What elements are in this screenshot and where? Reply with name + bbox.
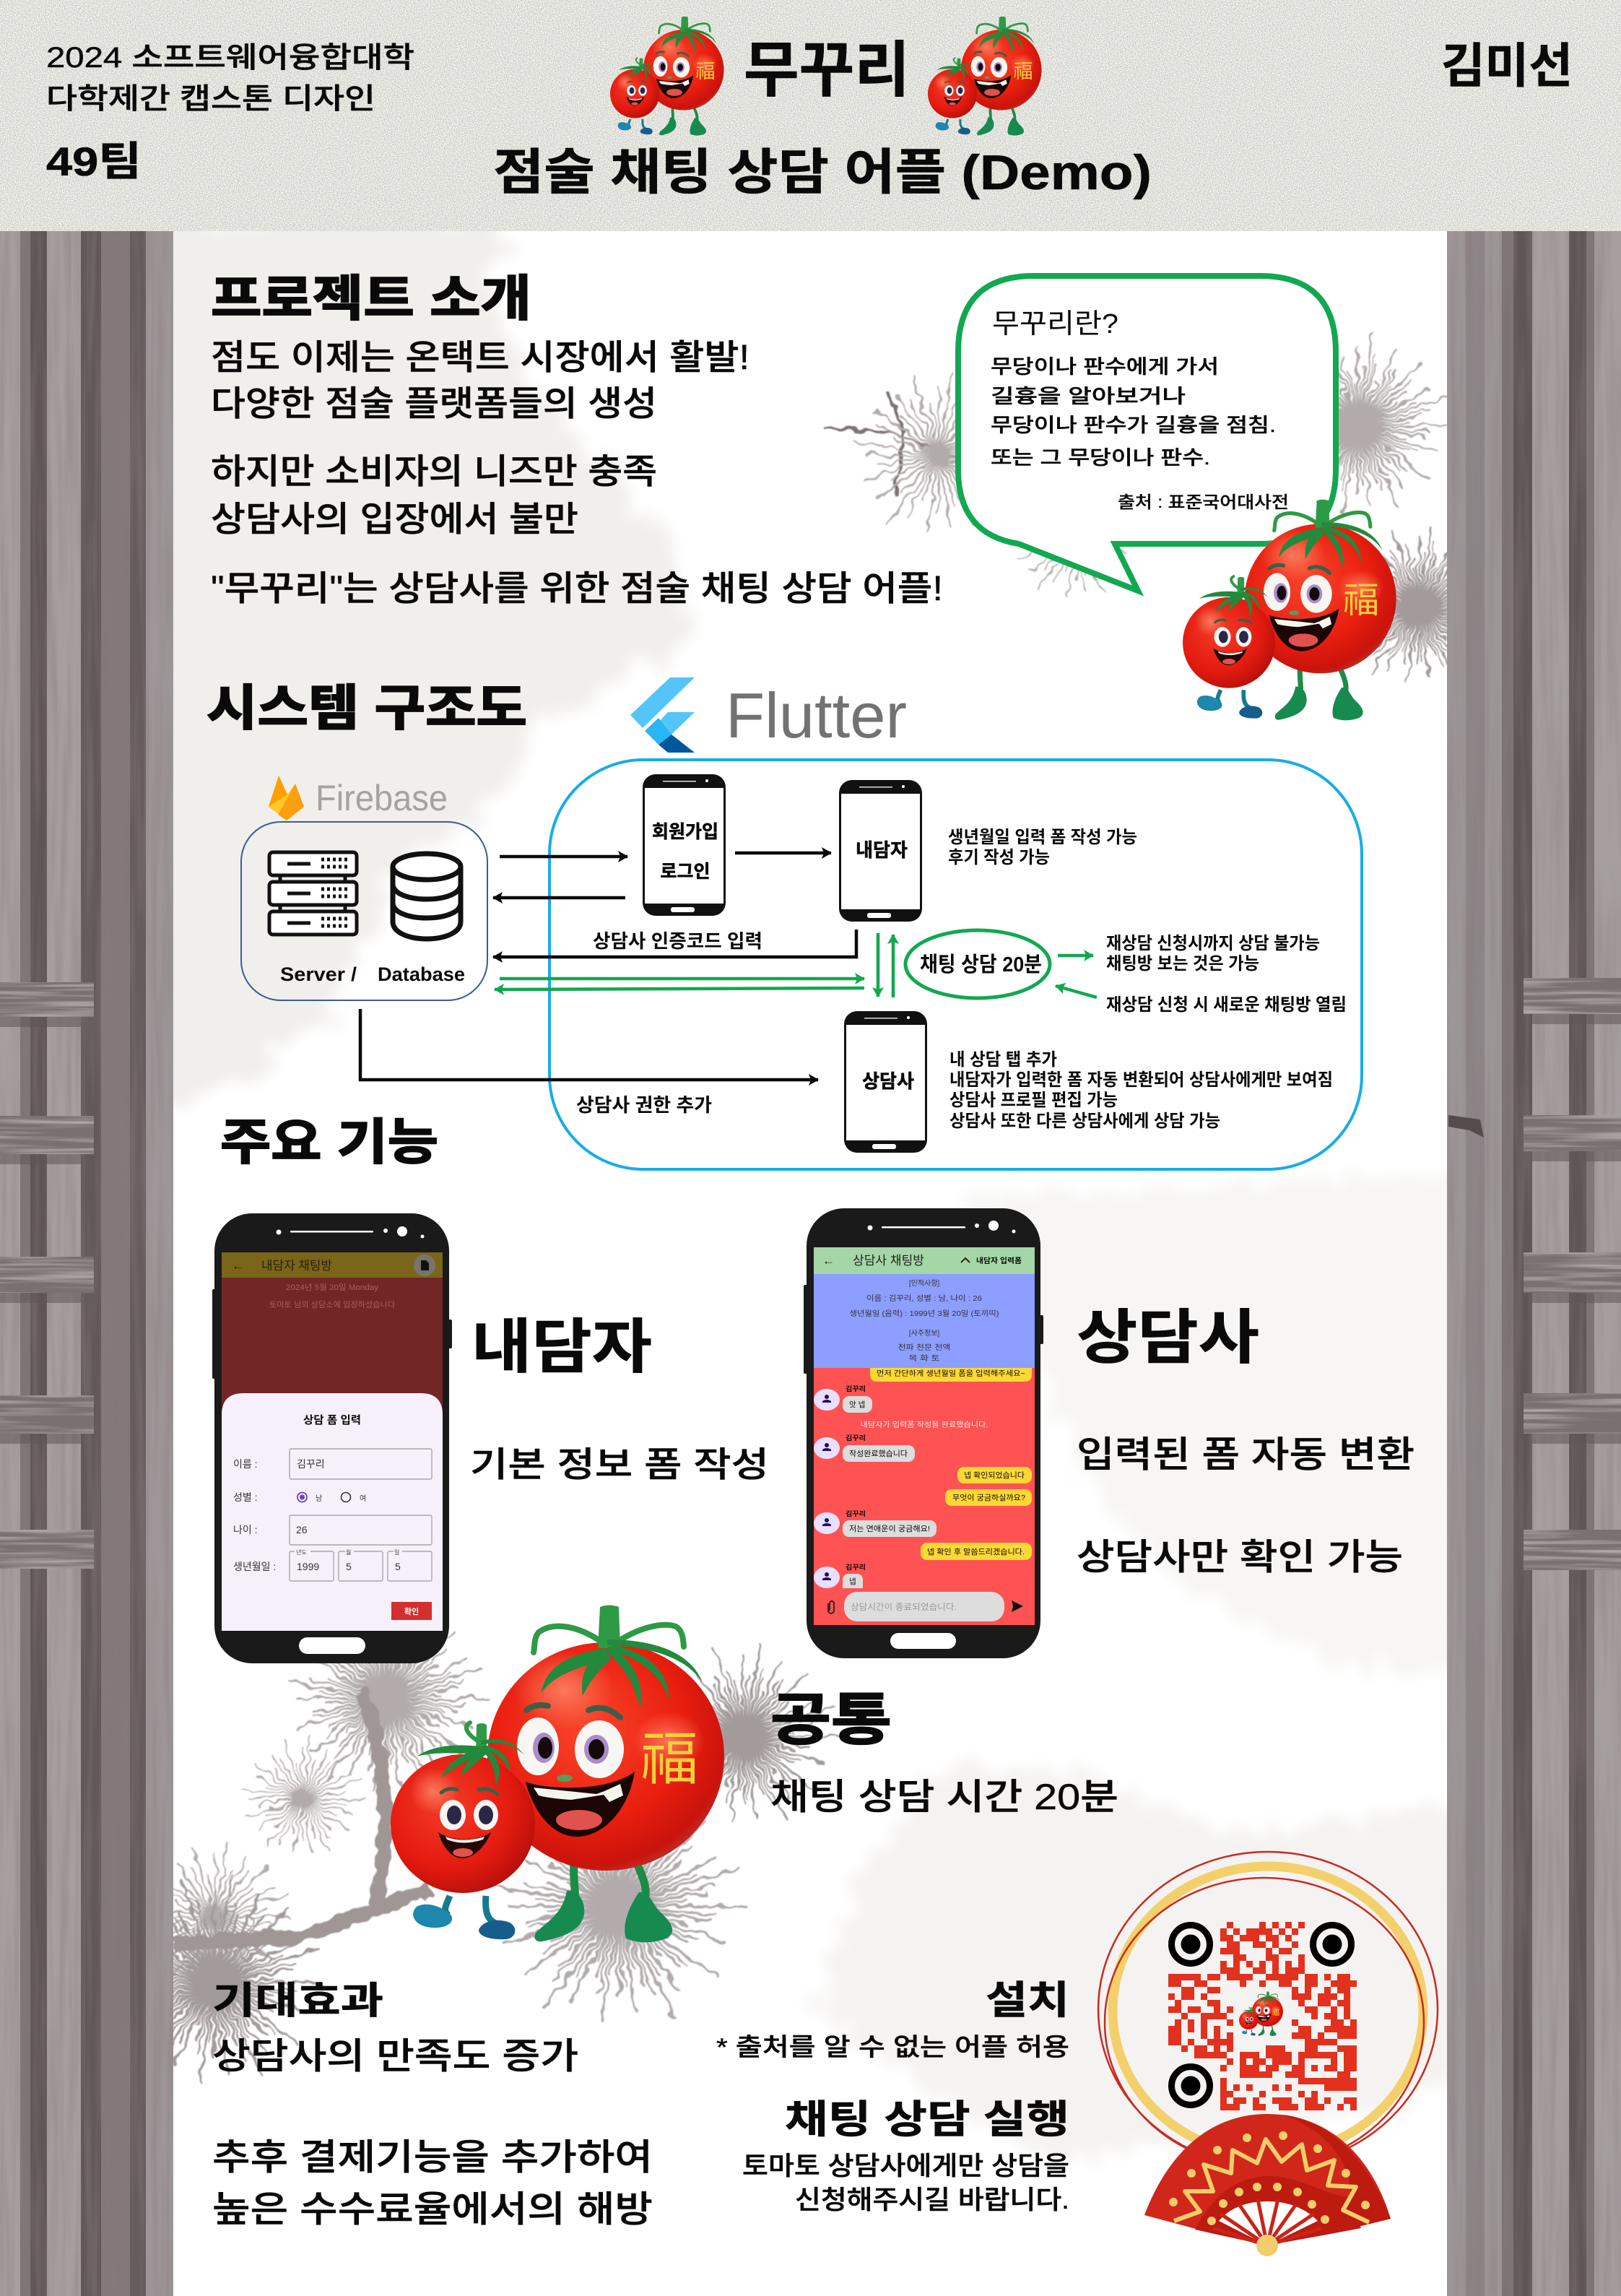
- phone screenshot: counselor: 김꾸리: [846, 1563, 866, 1571]
- speech bubble: definition: 길흉을 알아보거나: [991, 386, 1186, 407]
- notes: diagram descriptions: 재상담 신청시까지 상담 불가능: [1106, 934, 1320, 953]
- phone: signup and login: 로그인: [660, 862, 710, 882]
- feature text: client: 기본 정보 폼 작성: [470, 1446, 769, 1484]
- mascot: large tomatoes: 福: [640, 1727, 698, 1791]
- notes: diagram descriptions: 상담사 또한 다른 상담사에게 상담 가능: [949, 1112, 1220, 1131]
- panel: install and run guide: 토마토 상담사에게만 상담을: [742, 2151, 1069, 2180]
- phone screenshot: client: 월: [346, 1548, 351, 1556]
- header: mascot left: [610, 17, 724, 136]
- logo: Flutter: [630, 677, 907, 753]
- phone screenshot: counselor: 상담시간이 종료되었습니다.: [851, 1602, 957, 1612]
- phone screenshot: counselor: 생년월일 (음력) : 1999년 3월 20일 (토끼띠): [849, 1309, 999, 1318]
- panel: install and run guide: 설치: [986, 1979, 1069, 2022]
- header: course info: 49팀: [46, 139, 142, 184]
- notes: diagram descriptions: 내 상담 탭 추가: [949, 1050, 1057, 1070]
- phone screenshot: client: 나이 :: [233, 1524, 258, 1535]
- QR code: [1168, 1925, 1357, 2107]
- panel: project intro: "무꾸리"는 상담사를 위한 점술 채팅 상담 어플!: [211, 570, 943, 608]
- notes: diagram descriptions: 내담자가 입력한 폼 자동 변환되어 상담사에게만 보여짐: [949, 1070, 1333, 1090]
- mascot: beside bubble: [1183, 500, 1396, 720]
- speech bubble: definition: [958, 276, 1336, 591]
- phone screenshot: counselor: 넵 확인되었습니다: [964, 1470, 1025, 1480]
- panel: expected effects: 추후 결제기능을 추가하여: [212, 2137, 653, 2178]
- mascot: QR centre: 福: [1272, 2009, 1279, 2017]
- panel: expected effects: 높은 수수료율에서의 해방: [212, 2189, 653, 2230]
- icon: folding fan: [1144, 2114, 1391, 2256]
- header: title: 점술 채팅 상담 어플 (Demo): [493, 145, 1152, 200]
- phone screenshot: client: 김꾸리: [297, 1458, 325, 1470]
- phone screenshot: client: 성별 :: [233, 1491, 258, 1503]
- phone screenshot: counselor: 내담자 입력폼: [976, 1256, 1022, 1265]
- node: 20 minute chat: 채팅 상담 20분: [920, 953, 1042, 976]
- phone screenshot: client: 일: [394, 1549, 399, 1556]
- phone: counselor: 상담사: [862, 1070, 914, 1092]
- panel: project intro: 상담사의 입장에서 불만: [211, 501, 578, 539]
- phone screenshot: client: 5: [346, 1561, 352, 1572]
- phone screenshot: counselor: 무엇이 궁금하실까요?: [952, 1493, 1025, 1502]
- phone screenshot: counselor: [인적사항]: [909, 1279, 939, 1288]
- logo: Firebase: Firebase: [316, 778, 448, 818]
- notes: diagram descriptions: 후기 작성 가능: [948, 848, 1050, 867]
- phone screenshot: counselor: ←: [822, 1254, 835, 1268]
- feature text: common: 공통: [770, 1688, 892, 1751]
- panel: expected effects: [212, 1980, 653, 2230]
- phone screenshot: counselor: 김꾸리: [846, 1434, 866, 1442]
- feature text: common: [770, 1688, 1118, 1817]
- notes: diagram descriptions: 생년월일 입력 폼 작성 가능: [948, 828, 1137, 847]
- phone screenshot: counselor: 넵 확인 후 말씀드리겠습니다.: [927, 1547, 1025, 1556]
- node: 20 minute chat: [905, 930, 1050, 998]
- background: ink wash: [130, 217, 1473, 2159]
- door: left: [0, 231, 173, 2296]
- speech bubble: definition: 또는 그 무당이나 판수.: [991, 447, 1210, 469]
- header: mascot right: 福: [1014, 61, 1033, 82]
- feature text: client: 내담자: [471, 1314, 652, 1380]
- phone screenshot: client: ←: [232, 1259, 244, 1273]
- phone screenshot: client: 5: [395, 1561, 401, 1572]
- phone screenshot: client: 여: [360, 1494, 366, 1503]
- phone screenshot: client: 생년월일 :: [233, 1561, 276, 1572]
- phone screenshot: counselor: 목 화 토: [908, 1354, 940, 1363]
- mascot: large tomatoes: [391, 1605, 724, 1942]
- icon: server: [269, 852, 357, 935]
- phone screenshot: client: [212, 1213, 452, 1663]
- phone screenshot: client: 이름 :: [233, 1458, 258, 1470]
- header: mascot right: [928, 17, 1042, 136]
- phone screenshot: client: 남: [316, 1494, 322, 1503]
- phone: client: 내담자: [856, 839, 908, 861]
- background: paper: [173, 231, 1448, 2296]
- panel: project intro: 하지만 소비자의 니즈만 충족: [211, 453, 657, 491]
- phone screenshot: counselor: 앗 넵: [849, 1400, 865, 1409]
- QR finder marks: [1171, 1925, 1352, 2105]
- panel: server and database: [241, 822, 487, 1000]
- panel: project intro: 다양한 점술 플랫폼들의 생성: [211, 385, 657, 423]
- panel: project intro: 점도 이제는 온택트 시장에서 활발!: [211, 339, 749, 377]
- mascot: QR centre: [1239, 1991, 1283, 2036]
- labels: diagram arrows: 상담사 권한 추가: [576, 1094, 712, 1116]
- phone screenshot: counselor: 천파 천문 천액: [898, 1343, 950, 1352]
- phone screenshot: client: 년도: [296, 1548, 307, 1556]
- header: course info: 2024 소프트웨어융합대학: [46, 42, 414, 74]
- panel: install and run guide: 신청해주시길 바랍니다.: [795, 2185, 1069, 2214]
- phone screenshot: counselor: 내담자가 입력폼 작성을 완료했습니다.: [861, 1420, 988, 1429]
- phone screenshot: counselor: 상담사 채팅방: [853, 1254, 924, 1268]
- icon: database: [393, 854, 461, 939]
- panel: server and database: Server /: [280, 963, 357, 985]
- heading: main features: 주요 기능: [220, 1115, 438, 1170]
- phone screenshot: client: 상담 폼 입력: [303, 1414, 361, 1426]
- speech bubble: definition: 출처 : 표준국어대사전: [1118, 493, 1289, 511]
- arrows: diagram flow: [360, 853, 1097, 1080]
- speech bubble: definition: 무꾸리란?: [992, 309, 1118, 339]
- heading: project intro: 프로젝트 소개: [211, 272, 531, 326]
- phone: counselor: [844, 1011, 927, 1153]
- heading: system architecture: 시스템 구조도: [207, 681, 527, 736]
- notes: diagram descriptions: 채팅방 보는 것은 가능: [1106, 954, 1259, 974]
- feature text: counselor: [1077, 1305, 1414, 1577]
- panel: install and run guide: 채팅 상담 실행: [785, 2098, 1069, 2141]
- header: author name: 김미선: [1441, 39, 1573, 92]
- notes: diagram descriptions: [948, 828, 1347, 1131]
- phone screenshot: counselor: 먼저 간단하게 생년월일 폼을 입력해주세요~: [877, 1369, 1025, 1378]
- panel: flutter app boundary: [549, 760, 1362, 1169]
- header: logo word: 무꾸리: [744, 36, 910, 104]
- header: course info: 다학제간 캡스톤 디자인: [46, 83, 375, 115]
- feature text: common: 채팅 상담 시간 20분: [770, 1777, 1118, 1817]
- phone: client: [839, 780, 922, 922]
- mascot: beside bubble: 福: [1343, 580, 1379, 620]
- phone screenshot: client: 내담자 채팅방: [261, 1259, 332, 1273]
- panel: server and database: Database: [378, 963, 465, 985]
- notes: diagram descriptions: 상담사 프로필 편집 가능: [949, 1091, 1118, 1110]
- header band: [0, 0, 1621, 231]
- feature text: counselor: 입력된 폼 자동 변환: [1077, 1434, 1414, 1475]
- panel: expected effects: 기대효과: [212, 1980, 383, 2022]
- header: mascot left: 福: [696, 61, 715, 82]
- labels: diagram arrows: [576, 930, 762, 1116]
- decorative rings around QR: [1098, 1852, 1438, 2167]
- notes: diagram descriptions: 재상담 신청 시 새로운 채팅방 열림: [1106, 995, 1347, 1015]
- phone screenshot: counselor: 넵: [849, 1577, 856, 1586]
- labels: diagram arrows: 상담사 인증코드 입력: [593, 930, 762, 952]
- phone screenshot: counselor: [사주정보]: [909, 1329, 939, 1338]
- feature text: counselor: 상담사: [1077, 1305, 1259, 1371]
- panel: install and run guide: * 출처를 알 수 없는 어플 허용: [716, 2034, 1069, 2061]
- logo: Firebase: [269, 776, 448, 820]
- phone screenshot: client: 26: [296, 1524, 308, 1535]
- panel: project intro: [211, 272, 943, 608]
- door: right: [1447, 231, 1621, 2296]
- phone screenshot: counselor: 저는 연애운이 궁금해요!: [849, 1524, 930, 1533]
- phone screenshot: counselor: 이름 : 김꾸리, 성별 : 남, 나이 : 26: [866, 1294, 982, 1303]
- phone screenshot: counselor: 김꾸리: [846, 1509, 866, 1517]
- header: course info: [46, 42, 414, 184]
- feature text: counselor: 상담사만 확인 가능: [1077, 1537, 1403, 1577]
- panel: install and run guide: [716, 1979, 1069, 2214]
- phone screenshot: client: 확인: [404, 1606, 419, 1616]
- panel: expected effects: 상담사의 만족도 증가: [212, 2036, 578, 2076]
- phone screenshot: counselor: [804, 1208, 1043, 1658]
- feature text: client: [470, 1314, 769, 1484]
- phone screenshot: client: 2024년 5월 20일 Monday: [286, 1282, 379, 1292]
- phone screenshot: counselor: 작성완료했습니다: [849, 1449, 908, 1458]
- phone screenshot: client: 토마토 님의 상담소에 입장하셨습니다: [269, 1299, 395, 1309]
- background: pine branches: [108, 333, 1502, 2081]
- speech bubble: definition: 무당이나 판수에게 가서: [991, 356, 1219, 378]
- phone screenshot: counselor: 김꾸리: [846, 1385, 866, 1392]
- logo: Flutter: Flutter: [726, 680, 907, 751]
- speech bubble: definition: 무당이나 판수가 길흉을 점침.: [991, 415, 1276, 436]
- phone screenshot: client: 1999: [297, 1561, 319, 1572]
- phone: signup and login: [643, 774, 726, 916]
- phone: signup and login: 회원가입: [652, 822, 718, 842]
